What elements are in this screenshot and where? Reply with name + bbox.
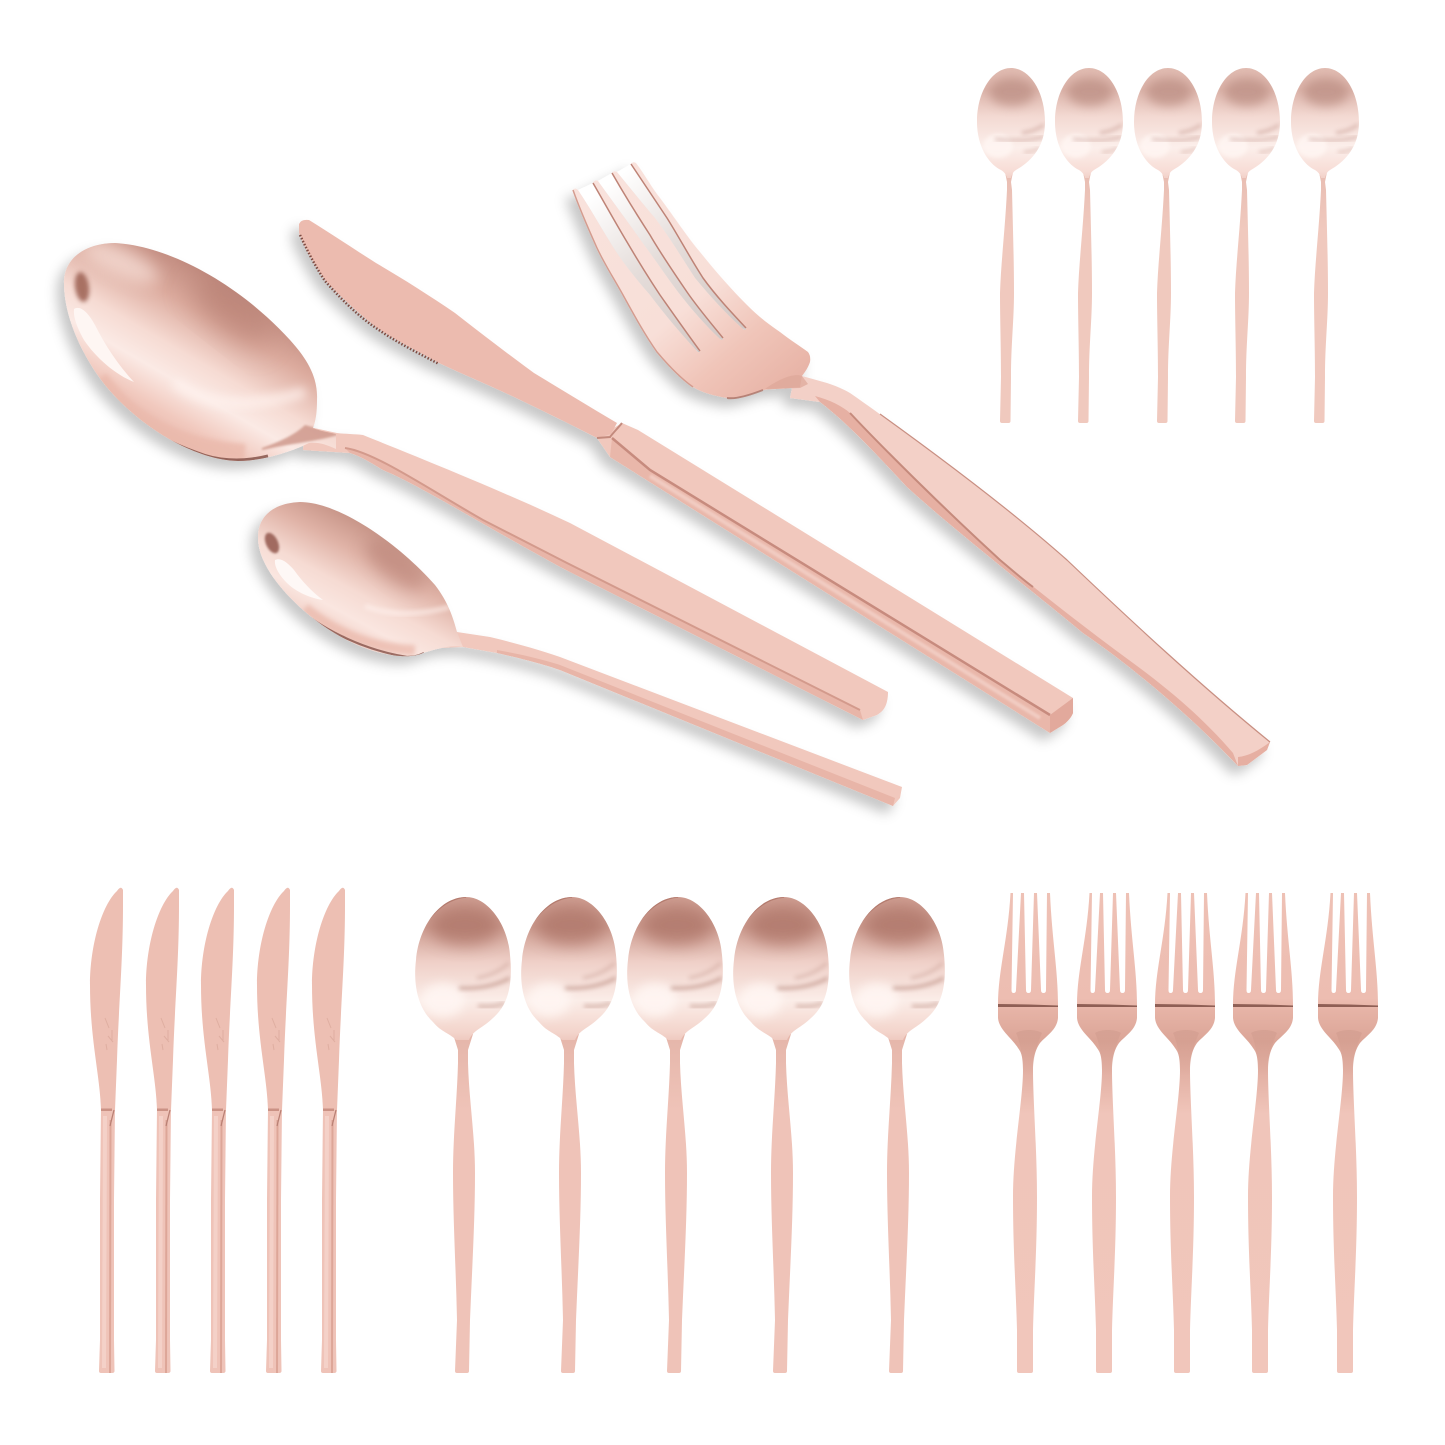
- lower lip shading: [100, 378, 245, 452]
- table fork 1: [998, 893, 1058, 1373]
- white slit: [74, 308, 134, 382]
- small spoon handle: [437, 625, 902, 806]
- teaspoon 2: [1053, 66, 1125, 423]
- teaspoon 4: [1210, 66, 1282, 423]
- table knife row, bottom left: [90, 888, 345, 1373]
- table fork 5: [1318, 893, 1378, 1373]
- fork slot shadows: [578, 164, 746, 351]
- knife handle: [597, 423, 1073, 733]
- teaspoon 3: [1132, 66, 1204, 423]
- dessert spoon row, bottom centre: [413, 895, 947, 1373]
- white slit: [275, 559, 323, 600]
- table fork 3: [1155, 893, 1215, 1373]
- dinner fork: [573, 162, 1270, 766]
- fork head and tines: [573, 162, 810, 399]
- small spoon bowl shading: [262, 530, 450, 657]
- fork tine dark edges: [593, 164, 746, 351]
- slot 3 shadow: [617, 164, 746, 329]
- fork neck shading: [765, 375, 808, 389]
- fork handle: [790, 374, 1270, 766]
- knife handle lower facet: [610, 438, 1050, 733]
- small soup spoon: [258, 502, 902, 806]
- dinner fork row, bottom right: [998, 893, 1378, 1373]
- table knife 2: [146, 888, 179, 1373]
- knife handle lower highlight: [650, 476, 1040, 718]
- lower lip shading: [305, 608, 415, 650]
- table fork 4: [1233, 893, 1293, 1373]
- fork handle end face: [1238, 742, 1270, 766]
- crescent highlight: [175, 382, 305, 403]
- small spoon bowl: [258, 502, 463, 656]
- table fork 2: [1077, 893, 1137, 1373]
- slot 2 shadow: [598, 173, 723, 339]
- fork outer edge: [573, 190, 693, 387]
- spoon bowl shading: [73, 232, 340, 460]
- knife handle ridge: [612, 438, 1050, 715]
- fork handle ridge: [850, 413, 1033, 587]
- dark reflection: [263, 532, 281, 555]
- crescent highlight: [365, 606, 450, 613]
- fork base rim: [727, 390, 763, 398]
- slot 1 shadow: [578, 183, 700, 351]
- table knife 5: [312, 888, 345, 1373]
- dessert spoon 1: [413, 895, 513, 1373]
- dark reflection: [73, 271, 91, 303]
- table knife 3: [201, 888, 234, 1373]
- knife blade: [299, 220, 617, 438]
- upper dark reflection: [192, 278, 270, 353]
- knife handle end face: [1050, 698, 1073, 733]
- teaspoon 5: [1289, 66, 1361, 423]
- dinner knife: [299, 220, 1073, 733]
- knife bolster: [597, 423, 622, 438]
- spoon handle lower facet: [345, 448, 863, 720]
- spoon bowl: [64, 243, 336, 461]
- dessert spoon 5: [847, 895, 947, 1373]
- fork handle top edge: [880, 414, 1270, 742]
- large serving spoon: [64, 232, 888, 720]
- dessert spoon 4: [731, 895, 831, 1373]
- upper left highlight: [80, 243, 163, 288]
- upper dark reflection: [363, 540, 426, 595]
- teaspoon row, top right: [975, 66, 1361, 423]
- table knife 4: [257, 888, 290, 1373]
- small spoon lower facet: [497, 650, 895, 806]
- dessert spoon 3: [625, 895, 725, 1373]
- spoon handle: [303, 426, 888, 720]
- dark rim: [312, 618, 424, 656]
- table knife 1: [90, 888, 123, 1373]
- dark rim: [170, 440, 268, 461]
- knife serration: [300, 235, 439, 364]
- fork handle lower facet: [815, 396, 1238, 766]
- spoon handle ridge: [345, 448, 860, 710]
- dessert spoon 2: [519, 895, 619, 1373]
- teaspoon 1: [975, 66, 1047, 423]
- neck shadow: [262, 425, 340, 450]
